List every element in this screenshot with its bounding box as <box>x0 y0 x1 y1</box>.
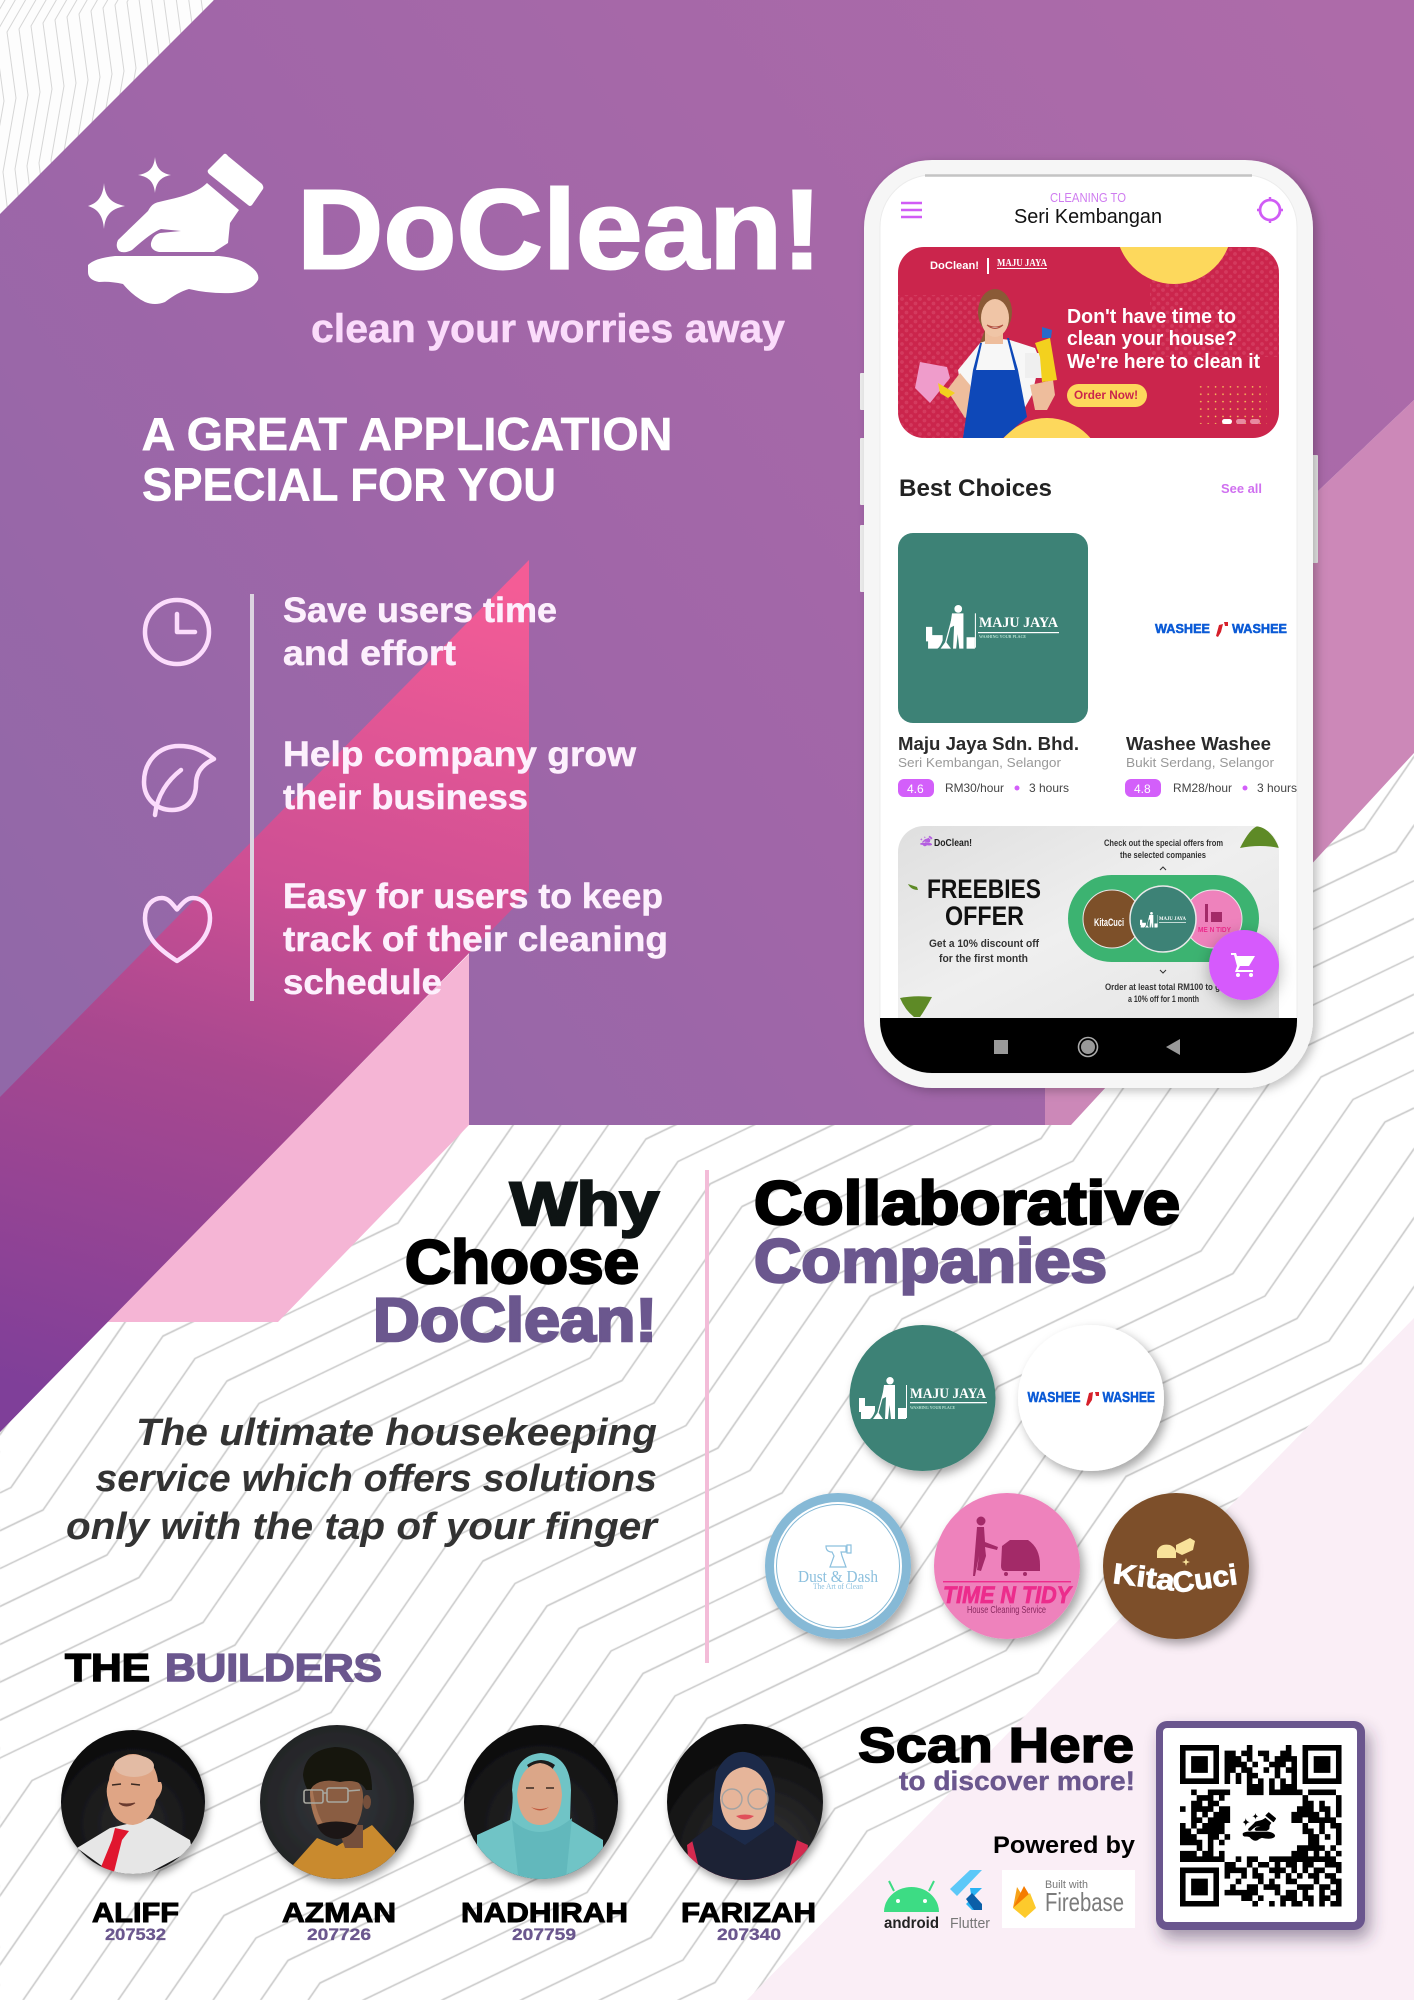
phone mockup <box>860 160 1318 1088</box>
team member: azman <box>260 1725 414 1944</box>
tagline: clean your worries away <box>311 307 786 351</box>
qr modules <box>1180 1748 1342 1904</box>
qr frame <box>1156 1721 1365 1930</box>
badge: maju jaya <box>850 1325 996 1471</box>
heading: collaborative companies: Collaborative <box>754 1169 1180 1237</box>
student id: 207726 <box>307 1925 371 1944</box>
logo: firebase <box>1002 1870 1135 1928</box>
pale pink corner shape <box>747 1318 1414 2000</box>
logo: flutter <box>950 1870 990 1932</box>
card: washee washee <box>1125 621 1297 797</box>
badge: maju jaya: MAJU JAYA <box>910 1386 986 1402</box>
rating pill <box>898 779 934 797</box>
heading: collaborative companies: Companies <box>754 1227 1107 1295</box>
name: FARIZAH <box>681 1897 816 1928</box>
nav square <box>994 1040 1008 1054</box>
name: AZMAN <box>282 1897 396 1928</box>
logo: android <box>884 1881 939 1932</box>
benefit text: grow business: Help company grow <box>283 735 637 774</box>
company location: Seri Kembangan, Selangor <box>898 755 1062 770</box>
benefits list <box>144 591 668 1002</box>
benefit text: save time: and effort <box>283 634 456 673</box>
nav back triangle <box>1166 1039 1180 1055</box>
description text: service which offers solutions <box>96 1458 657 1500</box>
description text: only with the tap of your finger <box>66 1506 659 1548</box>
portrait <box>61 1730 205 1874</box>
main purple background <box>0 0 1414 1432</box>
benefit text: grow business: their business <box>283 778 528 817</box>
benefit text: track schedule: schedule <box>283 963 442 1002</box>
icon: heart <box>145 898 210 961</box>
heading: why choose doclean: DoClean! <box>373 1286 657 1354</box>
maju jaya logo <box>926 605 1059 649</box>
section heading: best choices: Best Choices <box>899 475 1052 502</box>
android navigation bar <box>880 1018 1297 1073</box>
badge: time n tidy: House Cleaning Service <box>967 1605 1046 1616</box>
logo: firebase: Built with <box>1045 1879 1088 1891</box>
phone side buttons <box>860 373 1318 592</box>
company name: Maju Jaya Sdn. Bhd. <box>898 734 1079 754</box>
selected companies text: Check out the special offers from <box>1104 838 1223 849</box>
icon: cart <box>1231 953 1255 977</box>
heading: the builders: THE <box>65 1647 150 1690</box>
rating pill <box>1125 779 1161 797</box>
minimum order text <box>1105 984 1220 1002</box>
benefit text: track schedule: Easy for users to keep <box>283 877 663 916</box>
title: DoClean!: DoClean! <box>297 166 822 292</box>
benefit text: save time <box>283 591 557 673</box>
scan subheading: to discover more! <box>899 1766 1135 1796</box>
green company carousel: KitaCuci <box>1094 917 1124 929</box>
discount text <box>929 939 1040 962</box>
discount text: for the first month <box>939 953 1028 965</box>
phone screen <box>880 175 1297 1073</box>
company location: Bukit Serdang, Selangor <box>1126 755 1275 770</box>
right pink band <box>1045 400 1414 1125</box>
benefit text: track schedule <box>283 877 668 1002</box>
price and duration <box>1173 781 1297 795</box>
icon: leaf <box>144 746 214 815</box>
badge: dust and dash: The Art of Clean <box>813 1581 864 1591</box>
badge: dust and dash: Dust & Dash <box>798 1567 878 1586</box>
company badges <box>765 1325 1249 1639</box>
student id: 207532 <box>105 1925 166 1944</box>
logo: android: android <box>884 1915 939 1932</box>
freebies offer card <box>898 826 1279 1018</box>
minimum order text: a 10% off for 1 month <box>1128 994 1199 1005</box>
leaves <box>900 826 1279 1017</box>
icon: clock <box>145 600 209 664</box>
cleaning woman illustration <box>915 289 1057 438</box>
green company carousel <box>1068 875 1259 962</box>
description text <box>66 1412 659 1548</box>
portrait <box>260 1725 414 1880</box>
card brand: DoClean! <box>934 838 972 849</box>
green company carousel: MAJU JAYA <box>1159 916 1186 922</box>
logo: firebase: Firebase <box>1045 1887 1124 1917</box>
freebies headline: OFFER <box>945 901 1024 931</box>
heading: why choose doclean <box>373 1170 659 1354</box>
benefit text: track schedule: track of their cleaning <box>283 920 668 959</box>
badge: kitacuci: Cuci <box>1171 1559 1239 1600</box>
carousel indicator <box>1222 419 1260 424</box>
name: NADHIRAH <box>461 1897 628 1928</box>
list divider line <box>250 594 254 1001</box>
price and duration: 3 hours <box>1029 781 1069 795</box>
freebies headline <box>928 879 1040 926</box>
headline: a great application <box>142 408 672 510</box>
washee logo <box>1155 621 1287 637</box>
company name: Washee Washee <box>1126 734 1271 754</box>
promo banner: MAJU JAYA <box>997 258 1048 269</box>
freebies headline: FREEBIES <box>927 874 1041 904</box>
team member: aliff <box>61 1730 205 1944</box>
team member: farizah <box>667 1724 823 1944</box>
card: maju jaya <box>898 533 1088 797</box>
badge: dust and dash <box>765 1493 911 1639</box>
brand logo: hand wiping <box>88 154 263 304</box>
target icon <box>1257 197 1283 223</box>
banner headline: Don't have time to <box>1067 306 1236 328</box>
qr centre logo <box>1243 1812 1276 1841</box>
order now button <box>1067 384 1147 407</box>
price and duration: RM28/hour <box>1173 781 1232 795</box>
order now button: Order Now! <box>1074 390 1138 402</box>
badge: time n tidy <box>934 1493 1080 1639</box>
banner headline <box>1067 308 1260 368</box>
badge: washee washee: WASHEE <box>1102 1390 1155 1406</box>
magenta gradient diagonal band <box>0 560 529 1432</box>
vertical pink divider <box>705 1170 709 1663</box>
app header <box>901 190 1283 228</box>
heading: why choose doclean: Choose <box>405 1228 639 1296</box>
badge: kitacuci <box>1103 1493 1249 1639</box>
student id: 207340 <box>717 1925 781 1944</box>
maju jaya tile <box>898 533 1088 723</box>
badge: kitacuci: Kita <box>1111 1558 1178 1598</box>
nav circle <box>1078 1038 1098 1056</box>
badge: maju jaya: WASHING YOUR PLACE <box>910 1405 956 1410</box>
selected companies text <box>1104 840 1223 860</box>
minimum order text: Order at least total RM100 to get <box>1105 982 1228 993</box>
rating pill: 4.6 <box>907 782 924 796</box>
green company carousel: ME N TIDY <box>1198 927 1231 934</box>
washee logo: WASHEE <box>1155 621 1210 636</box>
heading: collaborative companies <box>754 1169 1180 1295</box>
team member: nadhirah <box>461 1725 628 1944</box>
menu icon <box>901 203 922 217</box>
location name: Seri Kembangan <box>1014 206 1162 228</box>
headline: a great application: A GREAT APPLICATION <box>142 408 672 460</box>
description text: The ultimate housekeeping <box>136 1412 657 1454</box>
logo: flutter: Flutter <box>950 1915 990 1932</box>
powered by label: Powered by <box>993 1832 1136 1859</box>
phone body <box>864 160 1313 1088</box>
top-left corner line pattern <box>0 0 230 230</box>
price and duration <box>945 781 1069 795</box>
portrait <box>464 1725 618 1880</box>
badge: washee washee <box>1018 1325 1164 1471</box>
heading: the builders <box>65 1647 382 1690</box>
portrait <box>667 1724 823 1880</box>
banner brand text: DoClean! <box>930 260 979 272</box>
price and duration: 3 hours <box>1257 781 1297 795</box>
card brand <box>920 836 972 846</box>
badge: washee washee: WASHEE <box>1028 1390 1081 1406</box>
maju jaya logo: MAJU JAYA <box>979 615 1058 631</box>
benefit text: grow business <box>283 735 637 817</box>
badge: time n tidy: TIME N TIDY <box>943 1582 1073 1609</box>
cart button <box>1209 930 1279 1000</box>
qr code <box>1156 1721 1365 1930</box>
price and duration: RM30/hour <box>945 781 1004 795</box>
selected companies text: the selected companies <box>1120 850 1206 861</box>
heading: why choose doclean: Why <box>510 1170 659 1238</box>
discount text: Get a 10% discount off <box>929 938 1039 950</box>
heading: the builders: BUILDERS <box>165 1647 382 1690</box>
scan here heading: Scan Here <box>858 1719 1134 1773</box>
rating pill: 4.8 <box>1134 782 1151 796</box>
light pink diagonal band <box>106 954 469 1322</box>
maju jaya logo: WASHING YOUR PLACE <box>979 634 1027 639</box>
see all link: See all <box>1221 481 1262 496</box>
student id: 207759 <box>512 1925 576 1944</box>
benefit text: save time: Save users time <box>283 591 557 630</box>
banner headline: clean your house? <box>1067 328 1237 350</box>
banner headline: We're here to clean it <box>1067 351 1260 373</box>
headline: a great application: SPECIAL FOR YOU <box>142 458 556 510</box>
washee logo: WASHEE <box>1232 621 1287 636</box>
location label: CLEANING TO <box>1050 190 1126 205</box>
name: ALIFF <box>92 1897 179 1928</box>
promo banner <box>898 247 1279 438</box>
